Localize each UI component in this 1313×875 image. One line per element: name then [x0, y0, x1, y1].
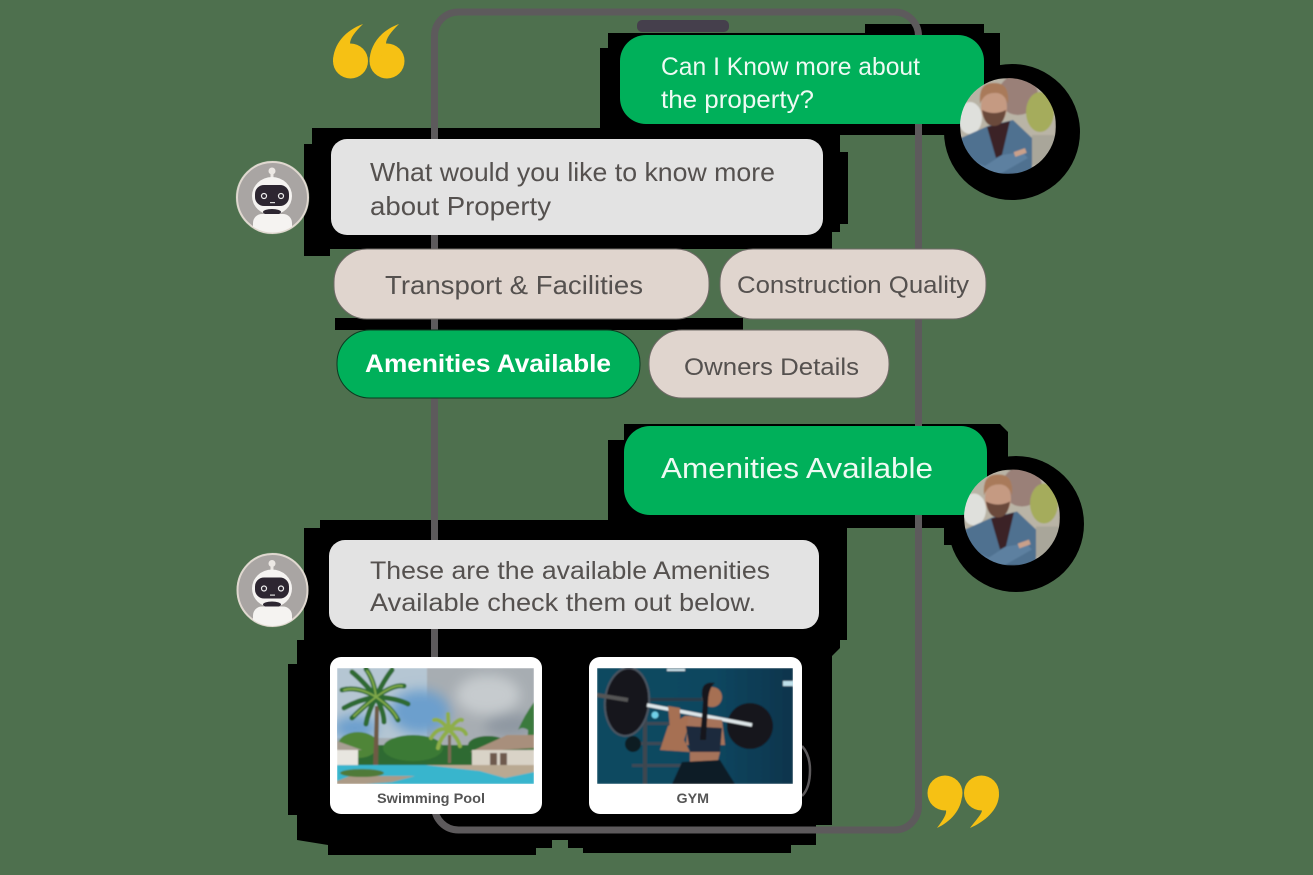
caption: GYM	[676, 790, 709, 806]
chatbot conversation infographic	[236, 8, 1084, 855]
card: swimming pool	[330, 657, 542, 814]
bot answer bubble: These are the available Amenities	[370, 557, 770, 585]
black shadow: lower bubbles and cards	[288, 424, 1008, 855]
option: Owners Details	[649, 330, 889, 398]
user message bubble 1: Can I Know more about	[661, 53, 920, 81]
bot question bubble: What would you like to know more	[370, 157, 775, 187]
bot question bubble: about Property	[370, 191, 551, 221]
option: Owners Details: Owners Details	[684, 354, 859, 381]
user message bubble 2	[624, 426, 987, 515]
black shadow: between option rows	[335, 318, 743, 330]
user avatar 2	[962, 466, 1060, 566]
phone frame outline	[434, 12, 918, 830]
user message bubble 2: Amenities Available	[661, 453, 933, 485]
option selected: Amenities Available	[337, 330, 640, 398]
black shadow: first user avatar	[944, 64, 1080, 200]
photo: resort pool with palm trees	[333, 668, 535, 784]
bot answer bubble	[329, 540, 819, 629]
black shadow: second user avatar	[948, 456, 1084, 592]
robot avatar 2	[236, 552, 308, 630]
icon: opening quotation mark	[333, 24, 404, 78]
option: Transport & Facilities: Transport & Facilities	[385, 270, 643, 300]
option: Construction Quality: Construction Quality	[737, 272, 970, 299]
bot question bubble	[331, 139, 823, 235]
black shadow: upper bubbles	[304, 24, 1000, 256]
option: Transport & Facilities	[334, 249, 709, 319]
card: gym	[589, 657, 802, 814]
user message bubble 1	[620, 35, 984, 124]
icon: closing quotation mark	[928, 776, 999, 828]
user avatar 1	[958, 75, 1056, 174]
robot avatar 1	[236, 160, 310, 238]
caption: Swimming Pool	[377, 790, 485, 806]
option selected: Amenities Available: Amenities Available	[365, 350, 611, 378]
option: Construction Quality	[720, 249, 986, 319]
user message bubble 1: the property?	[661, 86, 814, 114]
bot answer bubble: Available check them out below.	[370, 589, 756, 617]
photo: woman lifting a barbell	[597, 666, 795, 784]
